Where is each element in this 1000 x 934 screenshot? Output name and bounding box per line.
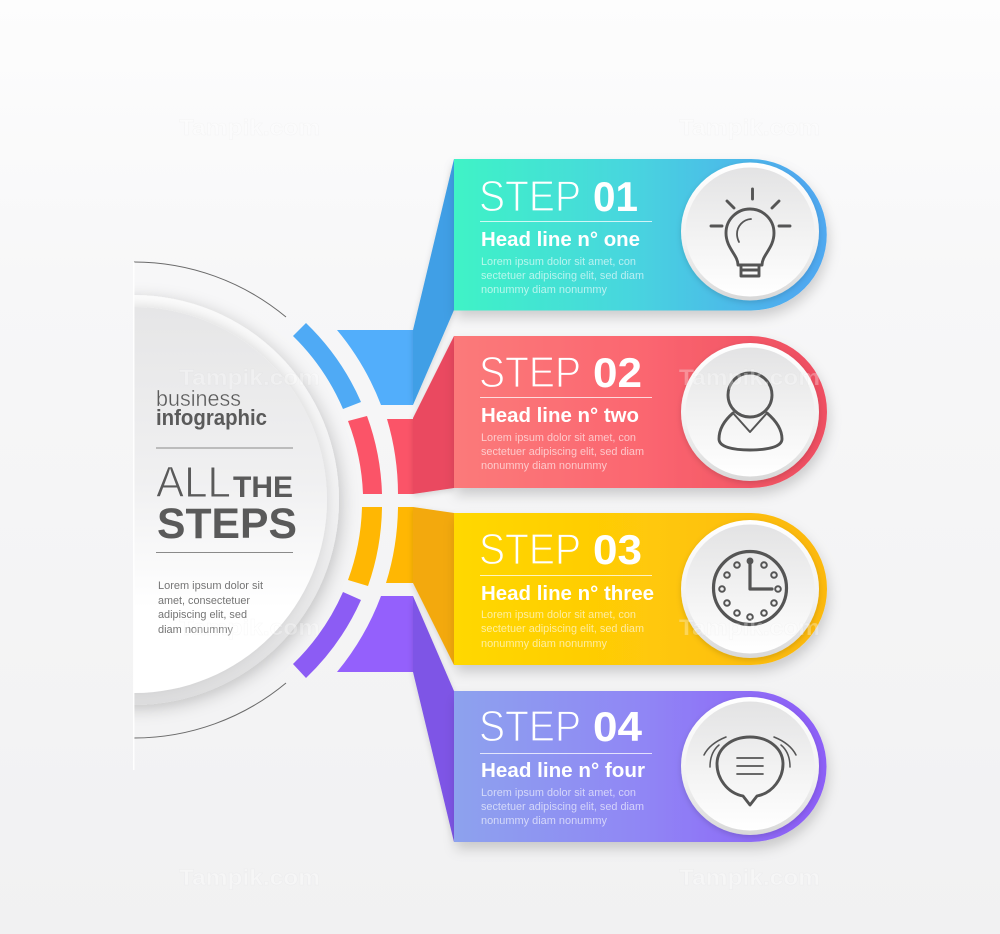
panel: step 03 — [454, 513, 827, 665]
circle outer ring — [134, 292, 350, 716]
panel: step 04 — [454, 691, 826, 842]
thin arc outline — [134, 262, 286, 738]
band — [454, 159, 827, 310]
step label: 03 — [593, 526, 642, 573]
divider bottom — [156, 552, 293, 553]
icon: light bulb — [711, 189, 790, 276]
watermarks — [179, 115, 820, 890]
watermarks: Tampik.com — [179, 865, 320, 890]
arc segment: blue — [293, 323, 361, 409]
body text — [481, 609, 644, 650]
body text: sectetuer adipiscing elit, sed diam — [481, 270, 644, 282]
connector: yellow — [386, 507, 454, 665]
icon: speech bubble — [704, 737, 796, 805]
arc segment: purple — [293, 592, 361, 678]
panel: step 02 — [454, 336, 827, 488]
body text — [481, 256, 644, 296]
connector: red — [387, 336, 454, 494]
body text: sectetuer adipiscing elit, sed diam — [481, 446, 644, 458]
icon button — [681, 162, 819, 300]
body text — [158, 580, 263, 636]
headline: Head line n° two — [481, 405, 639, 427]
headline: Head line n° one — [481, 229, 640, 251]
body text — [481, 432, 644, 472]
icon button — [681, 343, 819, 481]
headline: Head line n° four — [481, 760, 645, 782]
watermarks: Tampik.com — [179, 115, 320, 140]
panel: step 01 — [454, 159, 827, 310]
icon: person — [719, 373, 782, 450]
band — [454, 336, 827, 488]
step label: STEP — [479, 702, 581, 751]
body text: Lorem ipsum dolor sit — [158, 580, 263, 592]
title: all the steps: THE — [233, 471, 293, 504]
body text: nonummy diam nonummy — [481, 815, 607, 827]
body text: diam nonummy — [158, 624, 233, 636]
band — [454, 691, 826, 842]
icon button — [681, 520, 819, 658]
step label: STEP — [479, 172, 581, 221]
title: all the steps — [156, 458, 297, 548]
watermarks: Tampik.com — [679, 115, 820, 140]
headline: Head line n° three — [481, 583, 654, 605]
body text: nonummy diam nonummy — [481, 460, 607, 472]
arc segment: yellow — [348, 507, 382, 586]
body text: Lorem ipsum dolor sit amet, con — [481, 432, 636, 444]
body text: Lorem ipsum dolor sit amet, con — [481, 787, 636, 799]
watermarks: Tampik.com — [179, 615, 320, 640]
left edge line — [133, 262, 134, 770]
heading: business infographic: business — [156, 386, 241, 411]
icon button — [681, 697, 819, 835]
icon: clock — [714, 552, 786, 624]
heading: business infographic — [156, 386, 267, 430]
body text: sectetuer adipiscing elit, sed diam — [481, 623, 644, 635]
watermarks: Tampik.com — [679, 865, 820, 890]
arc segment: red — [348, 416, 382, 494]
panel: all the steps text — [156, 386, 297, 636]
panel: central half circle — [134, 262, 350, 738]
connector: blue — [337, 159, 454, 405]
title: all the steps: STEPS — [157, 500, 297, 548]
step label: STEP — [479, 348, 581, 397]
step label: 01 — [593, 173, 638, 220]
watermarks: Tampik.com — [179, 365, 320, 390]
step label: 02 — [593, 349, 642, 396]
watermarks: Tampik.com — [679, 615, 820, 640]
connector: purple — [337, 596, 454, 842]
body text: adipiscing elit, sed — [158, 609, 247, 621]
body text: amet, consectetuer — [158, 595, 250, 607]
body text — [481, 787, 644, 827]
heading: business infographic: infographic — [156, 405, 267, 430]
body text: nonummy diam nonummy — [481, 638, 607, 650]
body text: Lorem ipsum dolor sit amet, con — [481, 256, 636, 268]
body text: Lorem ipsum dolor sit amet, con — [481, 609, 636, 621]
band — [454, 513, 827, 665]
body text: nonummy diam nonummy — [481, 284, 607, 296]
title: all the steps: ALL — [156, 458, 231, 507]
divider top — [156, 448, 293, 449]
body text: sectetuer adipiscing elit, sed diam — [481, 801, 644, 813]
circle inner disc — [134, 303, 330, 693]
step label: STEP — [479, 525, 581, 574]
step label: 04 — [593, 703, 643, 750]
watermarks: Tampik.com — [679, 365, 820, 390]
